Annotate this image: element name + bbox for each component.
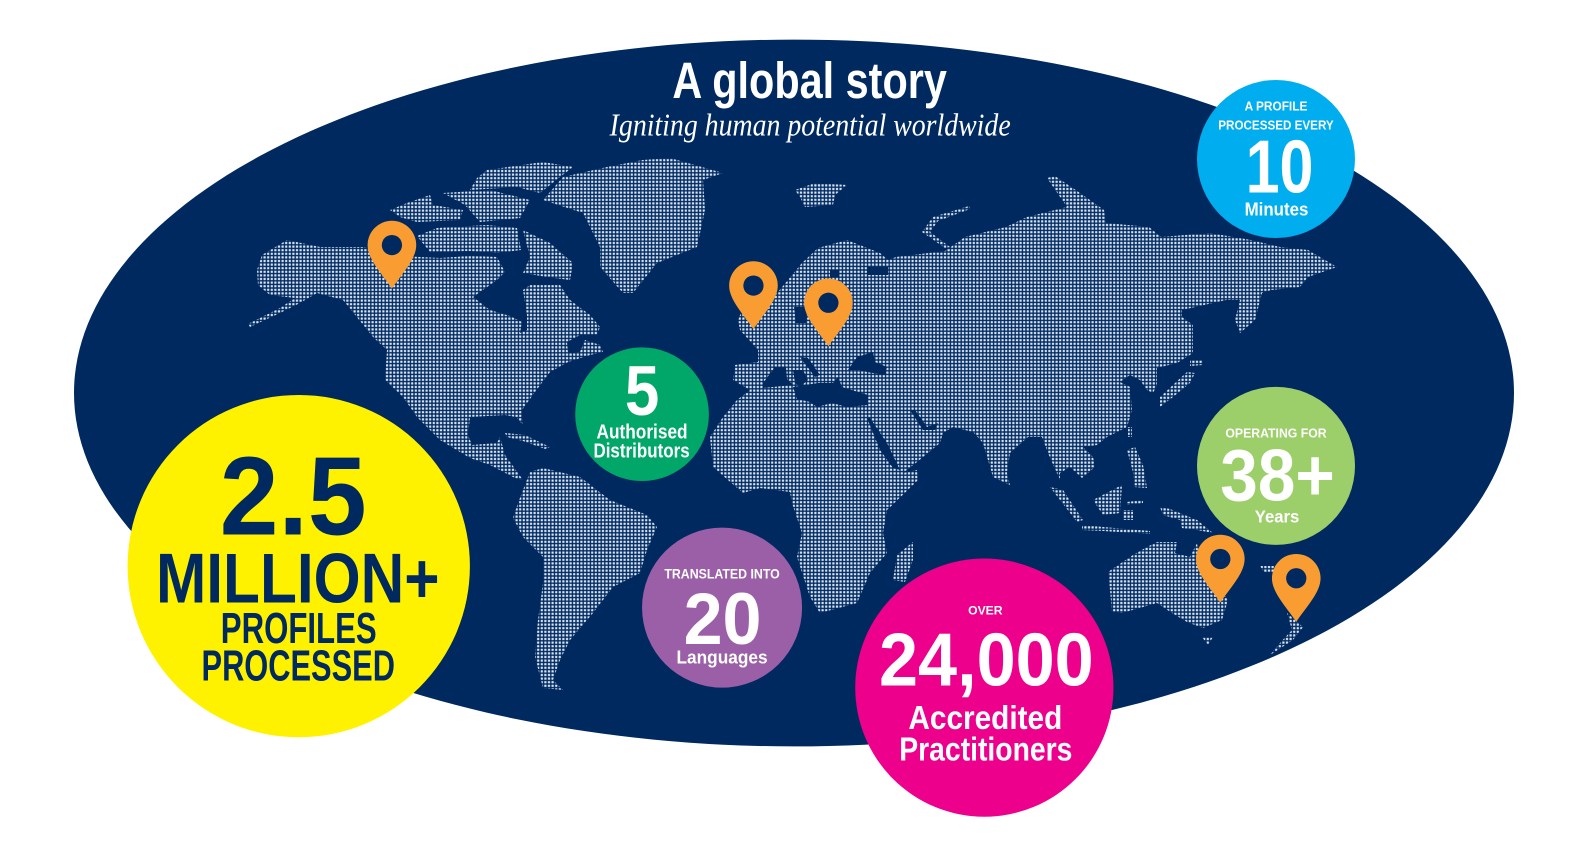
stat: 2.5 million+ profiles processed: PROCESSED	[202, 643, 395, 691]
stat: 2.5 million+ profiles processed: 2.5	[220, 434, 367, 559]
stat: over 24,000 accredited practitioners	[855, 559, 1113, 817]
stat: over 24,000 accredited practitioners: OVER	[968, 604, 1003, 618]
stat: over 24,000 accredited practitioners: Accredited	[908, 700, 1062, 737]
stat: 2.5 million+ profiles processed	[128, 395, 470, 737]
stat: over 24,000 accredited practitioners: 24,000	[879, 618, 1094, 702]
stat: operating for 38+ years: OPERATING FOR	[1225, 425, 1327, 440]
stat: 5 authorised distributors	[575, 347, 709, 481]
dotted world map	[248, 158, 1337, 690]
title: A global story	[672, 52, 947, 109]
stat: 5 authorised distributors: Authorised	[596, 421, 688, 443]
stat: profile processed every 10 minutes: Minutes	[1245, 200, 1308, 220]
stat: 2.5 million+ profiles processed: MILLION+	[156, 540, 440, 619]
stat: operating for 38+ years: Years	[1255, 507, 1299, 527]
stat: 5 authorised distributors: 5	[625, 352, 659, 431]
pin: United Kingdom	[729, 261, 778, 329]
pin: Australia	[1196, 535, 1245, 603]
pin: New Zealand	[1272, 554, 1321, 622]
stat: operating for 38+ years: 38+	[1220, 435, 1335, 516]
stat: 5 authorised distributors: Distributors	[593, 441, 690, 463]
pin: North America	[368, 221, 416, 289]
stat: translated into 20 languages: 20	[684, 579, 762, 660]
pin: Europe	[804, 278, 853, 346]
stat: profile processed every 10 minutes	[1197, 80, 1355, 238]
stat: over 24,000 accredited practitioners: Practitioners	[899, 732, 1072, 769]
navy oval background	[74, 40, 1514, 746]
stat: translated into 20 languages: TRANSLATED INTO	[664, 566, 780, 581]
stat: translated into 20 languages	[642, 528, 802, 688]
seas cut out of the map	[763, 267, 938, 470]
subtitle: Igniting human potential worldwide	[609, 108, 1011, 143]
stat: 2.5 million+ profiles processed: PROFILES	[221, 605, 377, 653]
stat: profile processed every 10 minutes: PROCESSED EVERY	[1218, 119, 1334, 133]
stat: profile processed every 10 minutes: A PROFILE	[1245, 99, 1307, 113]
stat: translated into 20 languages: Languages	[676, 647, 768, 667]
stat: operating for 38+ years	[1197, 387, 1355, 545]
stat: profile processed every 10 minutes: 10	[1246, 124, 1313, 208]
